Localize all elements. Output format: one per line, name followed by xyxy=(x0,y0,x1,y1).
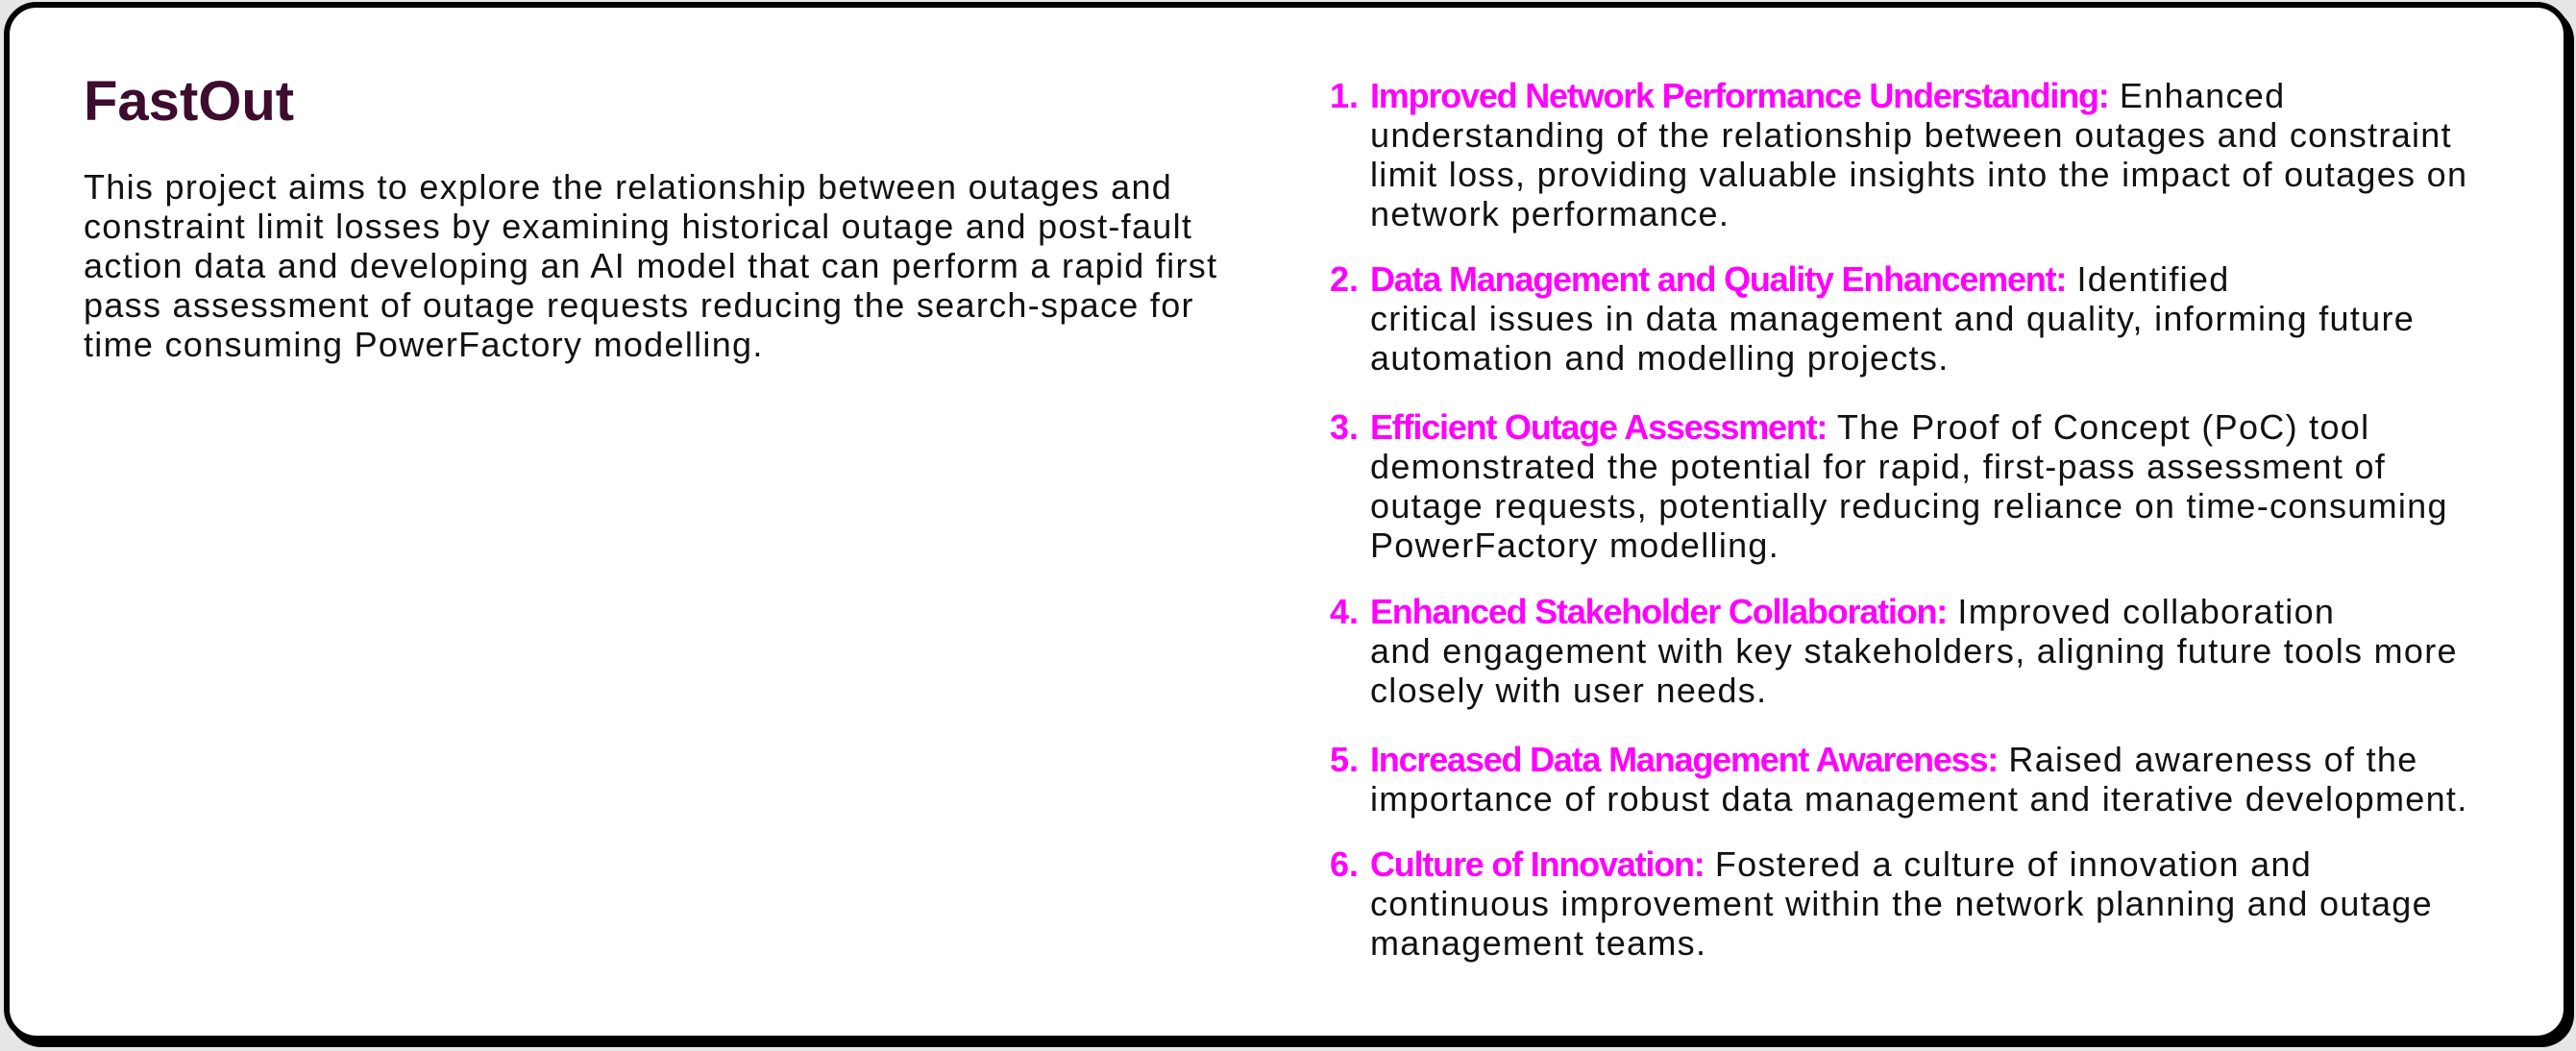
text: 5. xyxy=(1330,740,1359,779)
list item 3: outage requests, potentially reducing reliance on time-consuming xyxy=(1370,486,2448,526)
list item 3: Efficient Outage Assessment: The Proof of Concept (PoC) tool xyxy=(1370,407,2369,447)
list item 1: understanding of the relationship between outages and constraint xyxy=(1370,115,2452,155)
title: FastOut xyxy=(84,70,294,133)
list item 1 xyxy=(1330,76,2467,233)
list item 2: Data Management and Quality Enhancement: Identified xyxy=(1370,259,2230,299)
text block: description: pass assessment of outage requests reducing the search-space for xyxy=(84,285,1194,325)
list item 1: Improved Network Performance Understanding: Enhanced xyxy=(1370,76,2285,115)
text: 6. xyxy=(1330,844,1359,884)
text block: description: constraint limit losses by examining historical outage and post-fault xyxy=(84,207,1192,246)
text block: description xyxy=(84,167,1217,364)
list item 5: Increased Data Management Awareness: Raised awareness of the xyxy=(1370,740,2418,779)
list item 1: network performance. xyxy=(1370,194,1730,233)
list item 3: PowerFactory modelling. xyxy=(1370,526,1779,565)
list item 2 xyxy=(1330,259,2415,378)
text: 1. xyxy=(1330,76,1359,115)
text: 3. xyxy=(1330,407,1359,447)
text block: description: time consuming PowerFactory modelling. xyxy=(84,325,764,364)
list item 2: automation and modelling projects. xyxy=(1370,338,1950,378)
list item 5: importance of robust data management and iterative development. xyxy=(1370,779,2468,819)
list item 4: and engagement with key stakeholders, aligning future tools more xyxy=(1370,631,2458,671)
list item 6: Culture of Innovation: Fostered a culture of innovation and xyxy=(1370,844,2312,884)
list item 5 xyxy=(1330,740,2468,819)
text block: description: This project aims to explore the relationship between outages and xyxy=(84,167,1172,207)
list item 4: Enhanced Stakeholder Collaboration: Improved collaboration xyxy=(1370,592,2335,631)
text block: description: action data and developing an AI model that can perform a rapid first xyxy=(84,246,1217,285)
list item 6: continuous improvement within the network planning and outage xyxy=(1370,884,2433,923)
list item 6: management teams. xyxy=(1370,923,1706,963)
text: 2. xyxy=(1330,259,1359,299)
list item 2: critical issues in data management and quality, informing future xyxy=(1370,299,2415,338)
list item 3: demonstrated the potential for rapid, first-pass assessment of xyxy=(1370,447,2386,486)
list item 3 xyxy=(1330,407,2448,565)
list item 1: limit loss, providing valuable insights into the impact of outages on xyxy=(1370,155,2467,194)
list item 4 xyxy=(1330,592,2458,710)
text: 4. xyxy=(1330,592,1359,631)
list item 4: closely with user needs. xyxy=(1370,671,1767,710)
list item 6 xyxy=(1330,844,2433,963)
